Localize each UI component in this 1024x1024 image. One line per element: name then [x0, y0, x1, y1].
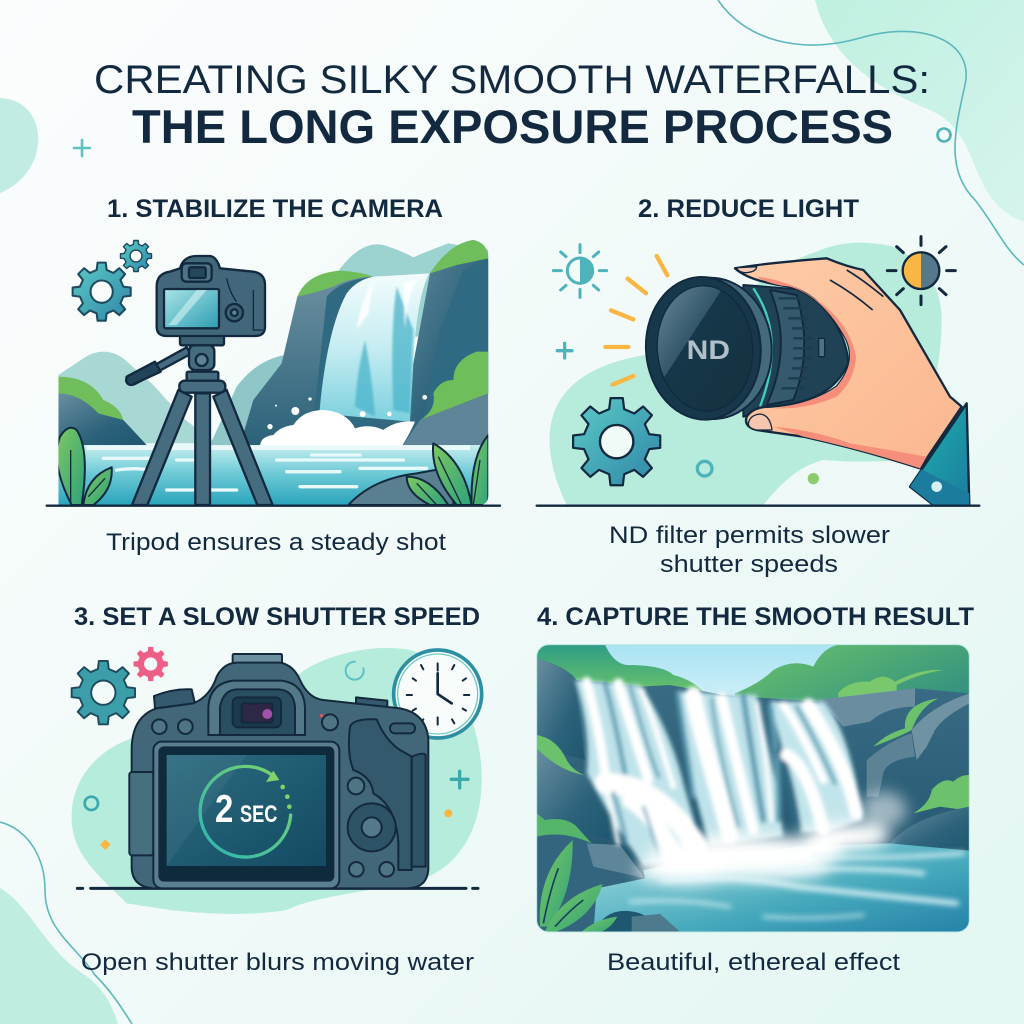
pool — [593, 843, 969, 933]
hand — [735, 258, 969, 505]
water ripples — [630, 853, 963, 918]
rock cliffs — [537, 658, 969, 933]
image frame — [537, 645, 969, 932]
caption: step 3: Open shutter blurs moving water — [81, 949, 474, 976]
mint blob — [550, 243, 942, 505]
heading: step 2: 2. REDUCE LIGHT — [638, 195, 859, 223]
foreground plants — [57, 428, 488, 505]
heading: step 4: 4. CAPTURE THE SMOOTH RESULT — [537, 603, 974, 631]
panel: reduce light — [537, 237, 979, 506]
caption: step 2: ND filter permits slower — [609, 522, 890, 549]
gear — [573, 398, 660, 485]
plus icon — [557, 343, 572, 358]
camera display — [167, 755, 326, 866]
mint blob — [72, 648, 482, 914]
small circles — [697, 461, 819, 484]
foreground plants — [540, 840, 680, 933]
heading: step 3: 3. SET A SLOW SHUTTER SPEED — [74, 603, 480, 631]
caption: step 2: shutter speeds — [660, 551, 838, 578]
mist and foam — [637, 792, 907, 884]
caption: step 4: Beautiful, ethereal effect — [607, 949, 900, 976]
caption: step 1: Tripod ensures a steady shot — [106, 529, 446, 556]
lens barrel — [743, 285, 848, 417]
tripod — [126, 345, 273, 505]
light rays — [605, 256, 667, 385]
small decorations — [85, 662, 468, 850]
ground line — [537, 502, 979, 509]
title: THE LONG EXPOSURE PROCESS — [132, 100, 893, 153]
heading: step 1: 1. STABILIZE THE CAMERA — [107, 195, 443, 223]
title — [94, 58, 930, 153]
right half-sun icon — [887, 237, 955, 305]
ground line — [47, 502, 500, 509]
panel: smooth waterfall result — [537, 645, 969, 933]
clock — [394, 650, 482, 738]
ground line — [77, 884, 478, 893]
camera on tripod — [157, 256, 265, 345]
camera body — [129, 654, 428, 888]
caption: step 2 — [609, 522, 890, 578]
panel: slow shutter speed — [72, 647, 482, 914]
gears — [72, 647, 168, 724]
camera display: 2 — [215, 787, 233, 831]
ND filter — [641, 273, 776, 423]
green hills — [537, 645, 969, 702]
panel: stabilize the camera — [47, 240, 500, 507]
left half-sun icon — [553, 245, 607, 297]
ND filter: ND — [687, 335, 730, 365]
gears — [73, 240, 152, 321]
falling water — [575, 680, 863, 867]
sky — [605, 645, 838, 696]
camera display: SEC — [240, 801, 277, 828]
title: CREATING SILKY SMOOTH WATERFALLS: — [94, 58, 930, 102]
waterfall scene — [57, 240, 488, 507]
